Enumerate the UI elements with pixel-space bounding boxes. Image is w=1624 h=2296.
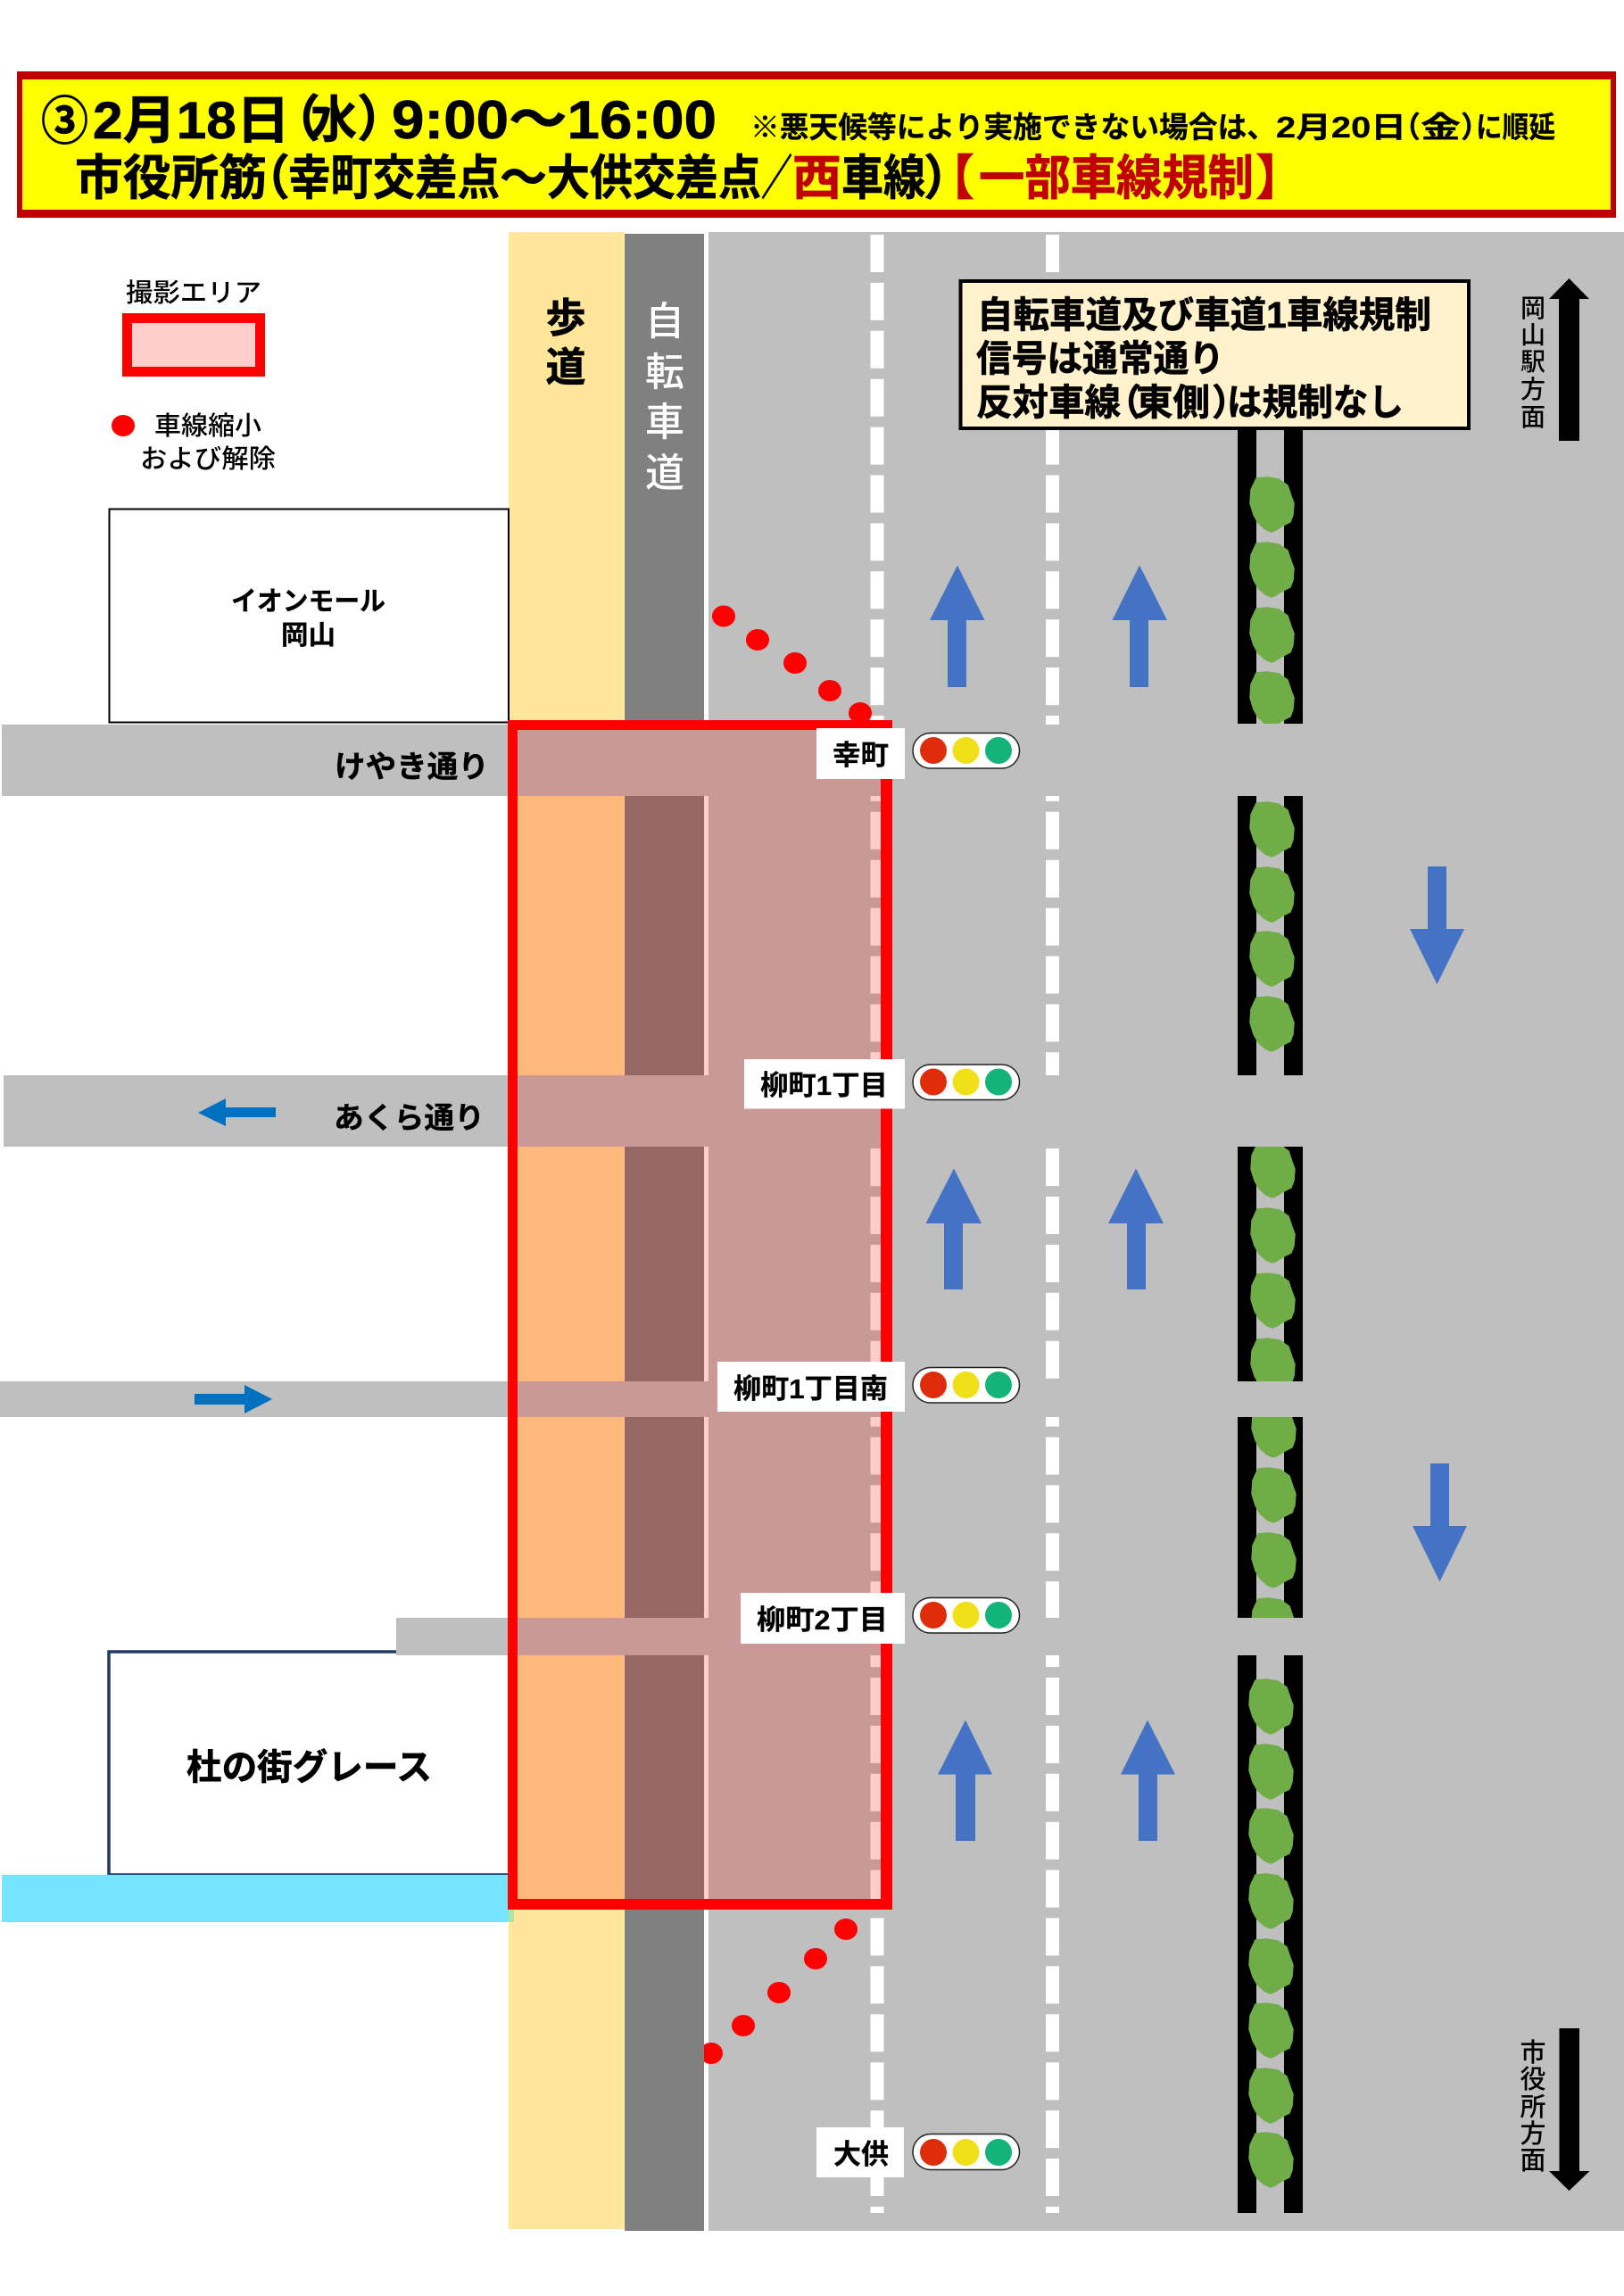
intersection: Saiwaicho [816,728,1019,779]
header banner [17,71,1616,218]
arrows: upward lane row 3 [938,1720,1175,1841]
direction: toward Okayama Station: 岡山駅方面 [1520,294,1545,431]
note: postponement: （ [1391,111,1421,144]
note: postponement: 金 [1421,111,1461,144]
callout: restriction details: ） [1212,382,1248,423]
arrow: Akura-dori traffic [198,1098,276,1126]
legend: filming area: 撮影エリア [126,278,261,308]
heading: date and time [41,90,717,151]
intersection: Yanagimachi 1-chome minami: 柳町1丁目南 [733,1373,888,1405]
traffic signal [913,1597,1019,1633]
side road: Akura-dori [4,1075,1624,1147]
callout: restriction details: 反対車線 [976,382,1121,423]
arrows: upward lane row 2 [926,1169,1164,1289]
callout: restriction details: （ [1105,382,1141,423]
building: Morinomachi Grace: 杜の街グレース [186,1748,432,1787]
callout: restriction details: 東側 [1136,382,1210,423]
label: sidewalk: 歩道 [545,295,586,390]
intersection: Otomo: 大供 [833,2139,889,2170]
side road: Yanagimachi 1-chome minami [0,1381,1624,1417]
median strip with trees [1238,430,1303,2213]
heading: road section and restriction: ／ [761,152,792,205]
heading: road section and restriction: 市役所筋 [75,152,267,205]
legend [112,278,276,474]
heading: road section and restriction: 一部車線規制 [979,152,1254,205]
legend: lane reduction [112,411,276,474]
building: Aeon Mall Okayama [109,509,509,723]
note: postponement: ） [1461,111,1490,144]
heading: road section and restriction: （ [242,152,290,205]
heading: road section and restriction: ） [924,152,972,205]
heading: road section and restriction: 西 [792,152,841,205]
legend: lane reduction: および解除 [140,444,276,474]
heading: road section and restriction: 大供交差点 [547,152,761,205]
direction: toward City Hall [1520,2028,1590,2191]
intersection: Yanagimachi 1-chome [744,1059,1019,1108]
building: Aeon Mall Okayama: イオンモール [231,587,385,617]
callout: restriction details: 信号は通常通り [976,338,1224,379]
callout: restriction details [960,281,1469,428]
heading: road section and restriction: 幸町交差点 [288,152,500,205]
side road: Yanagimachi 2-chome [396,1618,1624,1655]
heading: road section and restriction: 【 [926,152,974,205]
building: Morinomachi Grace [109,1652,510,1875]
main road [708,232,1624,2231]
heading: date and time: ③ [41,93,88,151]
traffic signal [913,1065,1019,1099]
direction: toward City Hall: 市役所方面 [1520,2038,1546,2176]
sidewalk [509,232,625,2229]
heading: road section and restriction: 車線 [841,152,925,205]
label: Keyaki-dori: けやき通り [335,750,489,784]
lane dashes [877,235,1053,2213]
heading: road section and restriction: 】 [1255,152,1304,205]
arrow: side road traffic [195,1385,272,1413]
lane reduction dots: north [712,605,872,724]
bicycle lane [625,234,704,2231]
traffic signal [913,734,1019,768]
building: Aeon Mall Okayama: 岡山 [281,621,336,651]
traffic signal [913,1367,1019,1403]
arrow: downward lane 1 [1410,866,1464,984]
label: Akura-dori: あくら通り [334,1101,485,1134]
heading: date and time: 2月18日 [93,92,290,150]
legend: lane reduction: 車線縮小 [154,411,261,441]
note: postponement: に順延 [1476,111,1555,144]
intersection: Saiwaicho: 幸町 [833,740,889,771]
arrow: downward lane 2 [1413,1463,1467,1581]
intersection: Yanagimachi 1-chome: 柳町1丁目 [760,1070,888,1101]
intersection: Otomo [816,2127,1019,2177]
note: postponement: ※悪天候等により実施できない場合は、 [750,111,1276,144]
heading: road section and restriction: ～ [500,152,547,205]
lane reduction dots: south [700,1919,858,2064]
callout: restriction details: は規制なし [1227,382,1404,423]
river [2,1875,514,1922]
side road: Keyaki-dori [2,725,1624,796]
legend: filming area [126,278,261,371]
intersection: Yanagimachi 2-chome [741,1593,1019,1644]
note: postponement: 2月20日 [1276,111,1406,144]
intersection: Yanagimachi 2-chome: 柳町2丁目 [757,1604,888,1636]
note: postponement [750,111,1555,144]
callout: restriction details: 自転車道及び車道1車線規制 [977,294,1431,336]
heading: road section and restriction [75,152,1304,205]
filming area frame [508,720,892,1910]
heading: date and time: （ [270,91,320,147]
heading: date and time: 9:00～16:00 [392,90,717,150]
direction: toward Okayama Station [1520,278,1589,441]
label: bicycle lane: 自転車道 [645,300,684,495]
arrows: upward lane row 1 [930,566,1167,687]
heading: date and time: ） [357,91,407,147]
traffic signal [913,2134,1019,2170]
intersection: Yanagimachi 1-chome minami [717,1362,1019,1412]
heading: date and time: 水 [311,92,357,148]
